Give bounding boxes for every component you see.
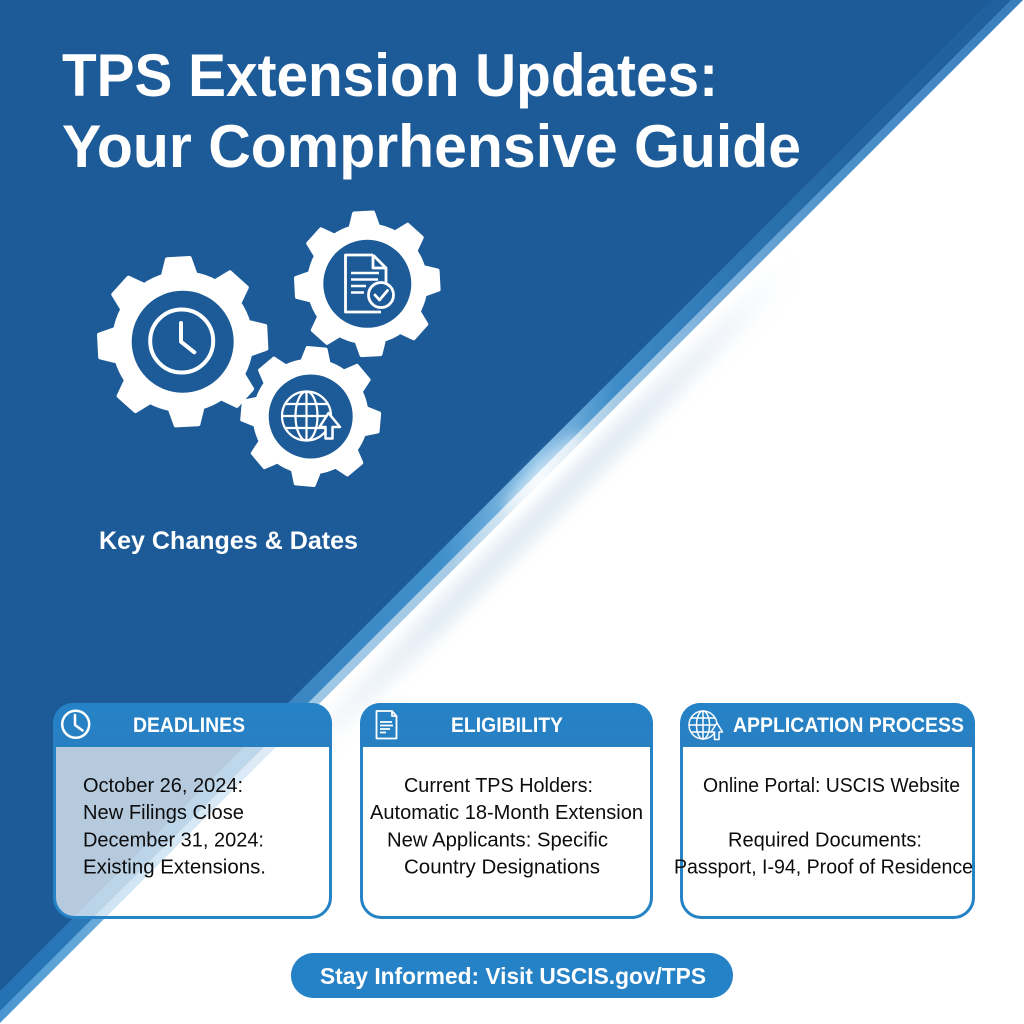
heading: deadlines: DEADLINES — [133, 713, 245, 737]
gear cluster icons — [95, 209, 442, 490]
text: deadlines body: December 31, 2024: — [83, 830, 264, 852]
header: deadlines — [53, 703, 332, 747]
title — [62, 42, 801, 180]
heading: eligibility: ELIGIBILITY — [451, 713, 563, 737]
text: eligibility body: Automatic 18-Month Extension — [370, 802, 643, 824]
panel: application process — [674, 703, 975, 918]
text: deadlines body — [83, 775, 266, 878]
title: Your Comprhensive Guide — [62, 113, 801, 180]
text: application process body: Online Portal: USCIS Website — [703, 775, 960, 797]
header: application process — [680, 703, 975, 747]
title: TPS Extension Updates: — [62, 42, 718, 109]
soft shadow along the diagonal — [290, 257, 800, 767]
header: eligibility — [360, 703, 653, 747]
text: deadlines body: October 26, 2024: — [83, 775, 243, 797]
icon: small globe — [689, 711, 722, 740]
panel: deadlines — [53, 703, 332, 918]
text: eligibility body: Country Designations — [404, 856, 600, 878]
light flare on the diagonal — [498, 427, 588, 517]
text: eligibility body: New Applicants: Specific — [387, 830, 608, 852]
text: application process body: Passport, I-94, Proof of Residence — [674, 856, 973, 878]
icon: globe gear — [237, 343, 385, 490]
text: deadlines body: Existing Extensions. — [83, 856, 266, 878]
icon: small document — [376, 711, 396, 738]
icon: clock gear — [95, 254, 270, 429]
text: eligibility body — [370, 775, 643, 878]
text: eligibility body: Current TPS Holders: — [404, 775, 593, 797]
icon: small clock — [62, 711, 89, 738]
icon: document gear — [293, 209, 442, 358]
heading: application process: APPLICATION PROCESS — [733, 713, 964, 737]
call to action button: Stay Informed: Visit USCIS.gov/TPS — [320, 963, 706, 989]
text: application process body — [674, 775, 973, 878]
panel: eligibility — [360, 703, 653, 918]
text: application process body: Required Documents: — [728, 830, 922, 852]
subtitle: key changes: Key Changes & Dates — [99, 527, 358, 555]
call to action button — [291, 953, 733, 998]
text: deadlines body: New Filings Close — [83, 802, 244, 824]
